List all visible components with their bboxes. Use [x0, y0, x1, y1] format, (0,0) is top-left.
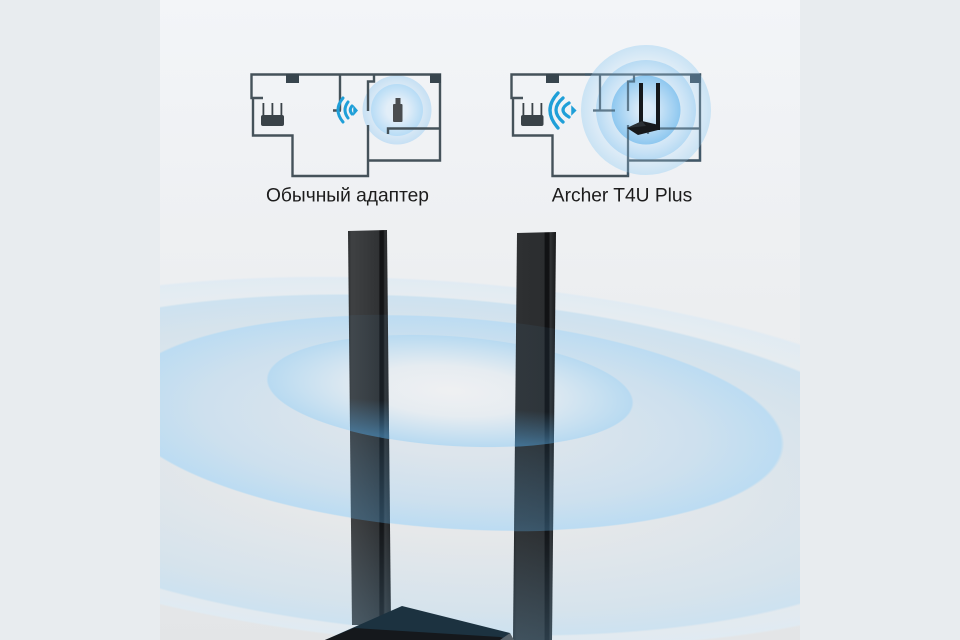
infographic canvas [160, 0, 800, 640]
adapter base [325, 606, 514, 640]
label: ordinary adapter: Обычный адаптер [266, 186, 429, 206]
label: Archer T4U Plus: Archer T4U Plus [552, 186, 692, 206]
large adapter product [325, 230, 556, 640]
signal circles around Archer T4U Plus [581, 45, 711, 175]
icon: router [261, 103, 284, 126]
walls lower layer [512, 74, 701, 176]
left floor plan: ordinary adapter [252, 74, 441, 176]
icon: router [521, 103, 544, 126]
icon: blocked wifi signal [338, 98, 357, 122]
icon: ordinary USB adapter [393, 98, 402, 122]
icon: strong wifi signal [550, 93, 576, 128]
right floor plan: Archer T4U Plus [512, 45, 711, 176]
icon: Archer T4U Plus adapter [627, 83, 660, 135]
left antenna [348, 230, 391, 625]
walls over circles [585, 74, 701, 176]
walls [252, 74, 441, 176]
blue tint on antennas [349, 315, 555, 640]
background panel [160, 0, 800, 640]
right antenna [513, 232, 556, 640]
signal circles around ordinary adapter [362, 76, 432, 144]
wifi signal ellipses [160, 270, 800, 640]
